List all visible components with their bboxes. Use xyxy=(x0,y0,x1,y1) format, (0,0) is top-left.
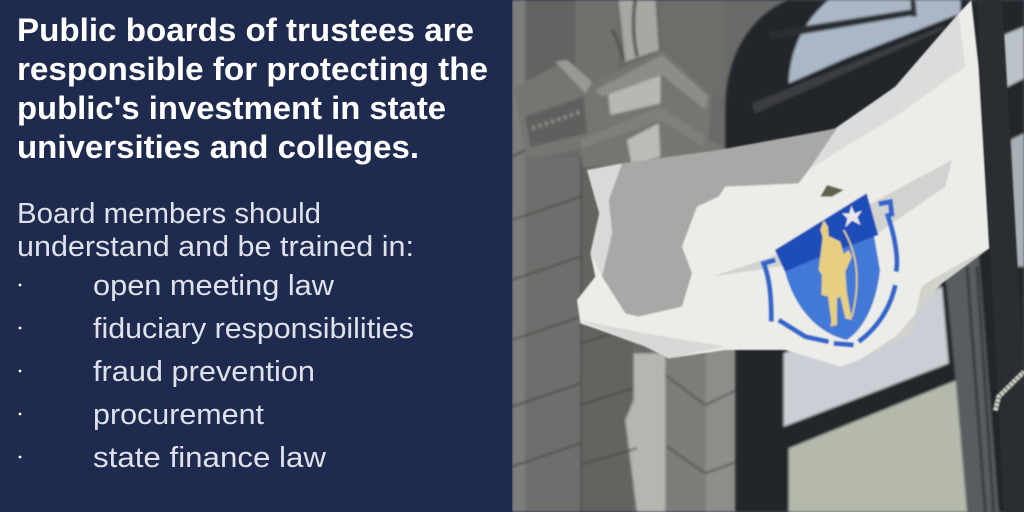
flag xyxy=(577,0,989,367)
intro text: understand and be trained in: xyxy=(17,231,414,263)
star xyxy=(842,206,862,227)
flag pole xyxy=(977,0,1024,512)
heading: universities and colleges. xyxy=(17,129,419,165)
arched window xyxy=(725,0,1024,512)
bullet list: state finance law xyxy=(93,442,327,474)
intro text xyxy=(17,198,414,263)
heading: public's investment in state xyxy=(17,90,446,126)
building stone wall xyxy=(512,0,1024,512)
figure xyxy=(819,220,852,327)
coat of arms xyxy=(764,185,897,345)
flag shadow xyxy=(602,128,837,317)
heading: responsible for protecting the xyxy=(17,51,488,87)
panel: text column xyxy=(17,12,488,474)
intro text: Board members should xyxy=(17,198,321,230)
shield xyxy=(775,193,880,340)
panel: photo of flag on building xyxy=(512,0,1024,512)
crest xyxy=(820,185,844,197)
bullet list: fiduciary responsibilities xyxy=(93,313,414,345)
bullet list xyxy=(19,270,414,474)
bullet list: fraud prevention xyxy=(93,356,315,388)
heading: Public boards of trustees are xyxy=(17,12,474,48)
scroll ribbon xyxy=(764,202,897,345)
bullet list: open meeting law xyxy=(93,270,335,302)
rope xyxy=(995,372,1024,411)
bullet list: procurement xyxy=(93,399,264,431)
heading xyxy=(17,12,488,165)
